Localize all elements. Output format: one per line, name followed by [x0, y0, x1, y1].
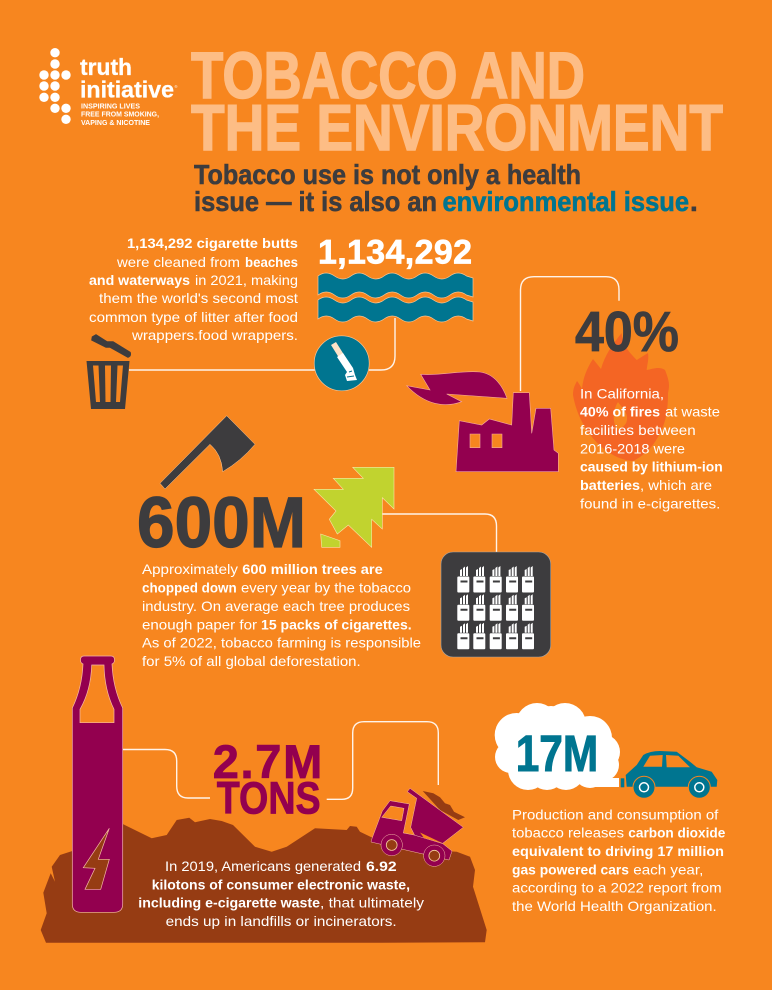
logo: truth initiative: truth — [80, 54, 132, 80]
subtitle: issue — it is also an — [194, 186, 437, 217]
paragraph: fires: facilities between — [580, 422, 696, 438]
subtitle: . — [690, 186, 698, 217]
paragraph: trees: As of 2022, tobacco farming is responsible — [142, 635, 421, 651]
paragraph: carbon dioxide: according to a 2022 report from — [512, 880, 722, 896]
stat: 2.7M tons — [213, 735, 322, 823]
paragraph: fires: at waste — [665, 404, 720, 420]
logo: truth initiative — [39, 48, 177, 127]
stat: 600M: 600M — [137, 484, 306, 563]
logo: truth initiative: INSPIRING LIVES — [81, 101, 140, 110]
paragraph: fires: 40% of fires — [580, 404, 660, 420]
logo: truth initiative: FREE FROM SMOKING, — [81, 110, 159, 119]
paragraph: trees: industry. On average each tree produces — [142, 598, 410, 614]
paragraph: cigarette butts — [89, 235, 298, 343]
paragraph: e-waste: , that ultimately — [320, 895, 424, 911]
paragraph: fires: batteries — [580, 477, 640, 493]
icon: felled tree — [314, 467, 394, 547]
paragraph: cigarette butts: 1,134,292 cigarette butts — [127, 235, 298, 251]
logo: truth initiative: VAPING & NICOTINE — [81, 118, 150, 127]
subtitle: Tobacco use is not only a health — [194, 159, 581, 190]
paragraph: fires: found in e-cigarettes. — [580, 495, 720, 511]
icon: box of vape pods — [441, 552, 551, 657]
paragraph: trees: 15 packs of cigarettes. — [261, 616, 412, 632]
landfill hill — [41, 818, 487, 943]
paragraph: e-waste: In 2019, Americans generated — [165, 858, 361, 874]
logo: truth initiative: ® — [174, 84, 178, 89]
icon: car — [621, 751, 717, 798]
paragraph: e-waste: ends up in landfills or incinerators. — [166, 913, 397, 929]
logo: truth initiative: initiative — [80, 76, 174, 102]
paragraph: fires — [580, 385, 723, 511]
paragraph: cigarette butts: wrappers.food wrappers. — [131, 327, 298, 343]
paragraph: carbon dioxide — [512, 806, 726, 914]
icon: dump truck — [371, 788, 465, 866]
subtitle — [194, 159, 698, 217]
paragraph: fires: 2016-2018 were — [580, 440, 685, 456]
icon: cigarette butt circle — [314, 336, 369, 391]
paragraph: carbon dioxide: each year, — [633, 861, 703, 877]
paragraph: e-waste: including e-cigarette waste — [138, 895, 320, 911]
paragraph: carbon dioxide: tobacco releases — [512, 825, 624, 841]
paragraph: trees: every year by the tobacco — [241, 580, 411, 596]
subtitle: environmental issue — [442, 186, 689, 217]
paragraph: carbon dioxide: gas powered cars — [512, 861, 629, 877]
paragraph: trees: Approximately — [142, 561, 238, 577]
paragraph: cigarette butts: and waterways — [89, 272, 190, 288]
paragraph: trees: enough paper for — [142, 616, 257, 632]
paragraph: cigarette butts: were cleaned from — [116, 254, 240, 270]
title: TOBACCO AND — [191, 38, 585, 112]
paragraph: trees: chopped down — [142, 580, 237, 596]
paragraph: trees: for 5% of all global deforestation. — [142, 653, 361, 669]
paragraph: e-waste — [138, 858, 424, 929]
paragraph: cigarette butts: common type of litter after food — [89, 309, 298, 325]
icon: factory and smoke — [407, 372, 558, 472]
paragraph: e-waste: kilotons of consumer electronic waste, — [152, 876, 410, 892]
stat: 2.7M tons: TONS — [217, 772, 321, 823]
paragraph: cigarette butts: beaches — [245, 254, 298, 270]
stat: 17M: 17M — [516, 725, 598, 782]
icon: vape device — [72, 656, 123, 912]
stat: 1,134,292: 1,134,292 — [318, 234, 472, 272]
paragraph: e-waste: 6.92 — [366, 858, 397, 874]
paragraph: fires: In California, — [580, 385, 664, 401]
stat: 40%: 40% — [575, 300, 679, 364]
icon: exhaust cloud — [495, 703, 620, 790]
icon: trash can — [86, 335, 130, 409]
paragraph: fires: , which are — [640, 477, 712, 493]
paragraph: cigarette butts: them the world's second most — [99, 290, 298, 306]
paragraph: carbon dioxide: carbon dioxide — [628, 825, 726, 841]
title — [191, 38, 723, 164]
paragraph: carbon dioxide: the World Health Organization. — [512, 898, 717, 914]
connector lines — [123, 277, 619, 799]
paragraph: trees: 600 million trees are — [242, 561, 383, 577]
icon: waves — [318, 273, 473, 322]
icon: axe — [160, 416, 255, 489]
icon: flame — [573, 333, 669, 461]
stat: 2.7M tons: 2.7M — [213, 735, 322, 788]
paragraph: fires: caused by lithium-ion — [580, 459, 723, 475]
paragraph: carbon dioxide: Production and consumption of — [512, 806, 718, 822]
paragraph: cigarette butts: in 2021, making — [195, 272, 298, 288]
paragraph: carbon dioxide: equivalent to driving 17 million — [512, 843, 724, 859]
paragraph: trees — [142, 561, 421, 669]
